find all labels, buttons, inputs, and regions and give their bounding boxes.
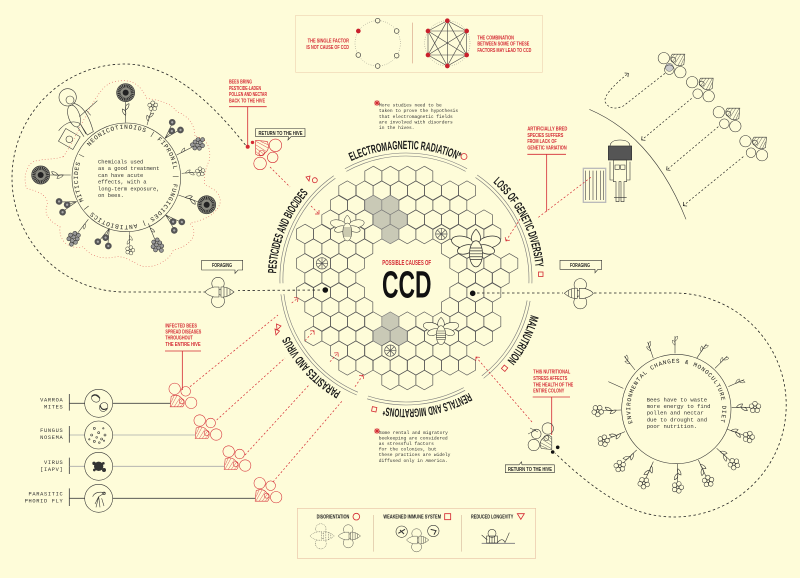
text: single factor: IS NOT CAUSE OF CCD — [306, 45, 349, 51]
row: parasitic phorid fly: PHORID FLY — [25, 499, 63, 505]
row: parasitic phorid fly: PARASITIC — [29, 492, 63, 498]
callout: pesticide pollen: PESTICIDE-LADEN — [229, 86, 261, 92]
center title — [382, 258, 432, 306]
ring: environmental changes — [622, 354, 731, 464]
text: bees have to waste: due to drought and — [647, 416, 707, 423]
legend: reduced longevity: REDUCED LONGEVITY — [471, 515, 514, 521]
row: virus IAPV: [IAPV] — [40, 467, 63, 473]
red dashed arrow: malnutrition into hive — [476, 357, 532, 422]
callout: artificially bred: ARTIFICIALLY BRED — [527, 127, 567, 133]
text: chemicals body: long-term exposure, — [98, 186, 159, 192]
icon: bee in hive, upper left — [330, 215, 365, 241]
callout: pesticide pollen — [229, 80, 267, 149]
text: bees have to waste: poor nutrition. — [647, 423, 697, 430]
text: treatment names on ring: NEONICOTINOIDS | FIPRONIL | FUNGICIDES | ANTIBIOTICS | MITICIDES | — [74, 124, 179, 230]
text: combination: FACTORS MAY LEAD TO CCD — [477, 48, 531, 54]
heading: parasites and virus: PARASITES AND VIRUS — [282, 337, 341, 398]
dashed flight path: left loop — [12, 64, 325, 292]
note: electromagnetic fields: taken to prove the hypothesis — [379, 108, 458, 114]
callout: infected bees — [165, 323, 202, 390]
note: rental and migratory beekeeping: Some rental and migratory — [379, 430, 448, 436]
text: ring label, environmental changes: ENVIRONMENTAL CHANGES & MONOCULTURE DIET — [626, 358, 726, 424]
label: return to the hive, top: RETURN TO THE HIVE — [258, 131, 303, 137]
red dashed arrow: pesticides into hive — [270, 167, 319, 214]
text: chemicals body: as a good treatment — [98, 166, 159, 172]
note: rental and migratory beekeeping: diffused only in America. — [379, 458, 448, 464]
panel: legend of effects — [297, 508, 536, 558]
note: electromagnetic fields: More studies need to be — [379, 102, 442, 108]
callout: artificially bred: GENETIC VARIATION — [527, 145, 567, 151]
heading: rentals and migrations: RENTALS AND MIGRATIONS* — [382, 393, 472, 418]
heading: loss of genetic diversity: LOSS OF GENETIC DIVERSITY — [493, 176, 544, 266]
callout: nutritional stress: STRESS AFFECTS — [533, 376, 567, 382]
ring: treatments — [72, 123, 181, 232]
icon: beekeeper spraying — [58, 89, 97, 150]
icon: large bee in hive, right — [450, 229, 502, 267]
panel: single factor versus combination — [296, 15, 542, 72]
dashed flight path: right loop — [472, 293, 786, 517]
row: varroa mites: VARROA — [40, 397, 63, 403]
solid curve — [589, 109, 686, 219]
callout: pesticide pollen: BACK TO THE HIVE — [229, 98, 265, 104]
icon: beekeeper — [608, 140, 632, 202]
note: rental and migratory beekeeping: as stressful factors — [379, 441, 434, 447]
label: foraging, left: FORAGING — [212, 263, 232, 269]
icons: bees in a row — [658, 52, 768, 161]
effect symbols on the ring — [275, 154, 543, 412]
legend: weakened immune system: WEAKENED IMMUNE SYSTEM — [383, 515, 441, 521]
hive: honeycomb — [296, 166, 518, 390]
note: electromagnetic fields — [374, 100, 458, 131]
callout: pesticide pollen: POLLEN AND NECTAR — [229, 92, 267, 98]
panel: pesticides and biocides — [25, 81, 220, 267]
callout: artificially bred — [527, 127, 567, 212]
text: combination: BETWEEN SOME OF THESE — [477, 42, 530, 48]
callout: pesticide pollen: BEES BRING — [229, 80, 252, 86]
panel: artificially bred bees — [527, 52, 768, 219]
center title: CCD — [382, 264, 432, 306]
note: rental and migratory beekeeping: beekeeping are considered — [379, 436, 448, 442]
callout: artificially bred: SPECIES SUFFERS — [527, 133, 564, 139]
note: rental and migratory beekeeping: these practices are widely — [379, 452, 451, 458]
label: return to the hive, bottom — [505, 462, 554, 473]
icon: bee returning, lower right — [528, 423, 560, 454]
icon: foraging bee, right — [564, 279, 593, 309]
row: parasitic phorid fly — [25, 484, 258, 512]
text: single factor: THE SINGLE FACTOR — [308, 39, 349, 45]
note: rental and migratory beekeeping: for the colonies, but — [379, 446, 437, 452]
row: varroa mites: MITES — [44, 405, 63, 411]
icon: hive frame — [583, 168, 606, 202]
row: varroa mites — [40, 389, 177, 417]
icons: infected red bees — [169, 383, 282, 503]
panel: environmental changes and monoculture — [592, 336, 761, 493]
hive entrance dots — [322, 287, 476, 296]
label: foraging, right: FORAGING — [570, 263, 590, 269]
legend: disorientation — [310, 513, 360, 549]
icon: foraging bee, left — [205, 277, 234, 308]
row: fungus nosema: FUNGUS — [40, 428, 63, 434]
label: foraging, right — [560, 260, 602, 273]
red dashed arrows: parasites into hive — [190, 298, 363, 482]
text: chemicals body: Chemicals used — [98, 160, 143, 166]
row: virus IAPV — [40, 452, 230, 480]
callout: infected bees: THE ENTIRE HIVE — [165, 342, 201, 348]
diagram: combination network — [425, 18, 470, 68]
note: electromagnetic fields: are involved with disorders — [379, 119, 453, 125]
text: combination: THE COMBINATION — [477, 35, 514, 41]
note: electromagnetic fields: that electromagnetic fields — [379, 114, 453, 120]
red dashed: bred bees into hive — [538, 177, 592, 217]
callout: nutritional stress: THIS NUTRITIONAL — [533, 370, 571, 376]
plants around the ring — [32, 84, 218, 255]
red dashed arrow: genetics into hive — [506, 219, 520, 241]
row: fungus nosema: NOSEMA — [40, 435, 63, 441]
text: chemicals body: can have acute — [98, 173, 143, 179]
callout: nutritional stress — [533, 370, 573, 435]
text: bees have to waste: more energy to find — [647, 403, 710, 410]
ring: double arcs around the hive — [280, 153, 532, 405]
dashed flight arrows — [605, 73, 743, 206]
text: bees have to waste: Bees have to waste — [647, 396, 707, 403]
legend: reduced longevity — [471, 514, 524, 543]
label: foraging, left — [202, 260, 243, 274]
callout: infected bees: THROUGHOUT — [165, 336, 193, 342]
row: fungus nosema — [40, 421, 200, 449]
diagram: single factor ring — [355, 18, 400, 68]
icon: red bee returning — [254, 139, 282, 170]
center title: POSSIBLE CAUSES OF — [382, 258, 431, 267]
label: return to the hive, bottom: RETURN TO THE HIVE — [508, 467, 552, 473]
callout: artificially bred: FROM LACK OF — [527, 139, 557, 145]
text: bees have to waste: pollen and nectar — [647, 410, 704, 417]
legend: weakened immune system — [383, 514, 451, 552]
heading: electromagnetic radiation: ELECTROMAGNETIC RADIATION* — [348, 140, 462, 161]
panel: parasites and viruses — [25, 323, 282, 512]
dotted outline around plants — [25, 81, 220, 267]
callout: nutritional stress: THE HEALTH OF THE — [533, 382, 573, 388]
text: chemicals body: effects, with a — [98, 180, 147, 186]
heading: pesticides and biocides: PESTICIDES AND BIOCIDES — [268, 188, 308, 273]
plants around the ring — [592, 336, 761, 493]
heading: malnutrition: MALNUTRITION — [507, 315, 539, 366]
text: chemicals body: on bees. — [98, 193, 124, 199]
icon: bee in hive, lower — [422, 317, 460, 345]
row: virus IAPV: VIRUS — [44, 460, 63, 466]
callout: infected bees: INFECTED BEES — [165, 323, 197, 329]
note: rental and migratory beekeeping — [374, 428, 451, 464]
callout: infected bees: SPREAD DISEASES — [165, 330, 202, 336]
legend: disorientation: DISORIENTATION — [317, 515, 349, 521]
callout: nutritional stress: ENTIRE COLONY — [533, 389, 564, 395]
note: electromagnetic fields: in the hives. — [379, 125, 414, 131]
label: return to the hive, top — [256, 128, 305, 140]
